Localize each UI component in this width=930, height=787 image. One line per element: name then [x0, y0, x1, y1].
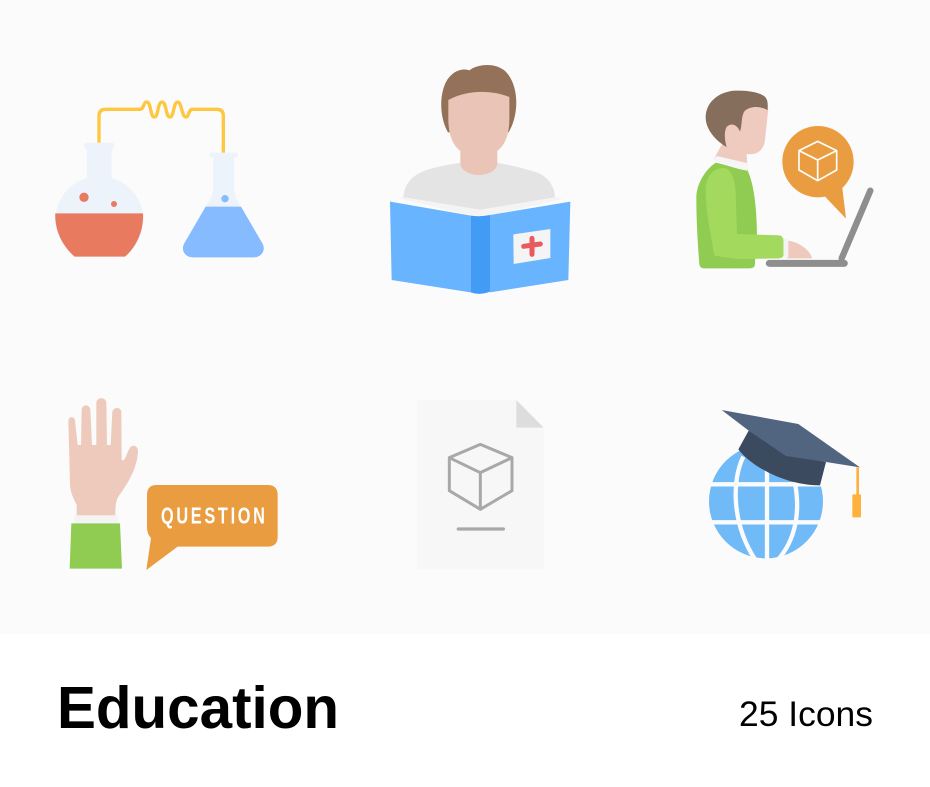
- icon: person at laptop with speech bubble: [696, 91, 870, 268]
- icon: raised hand with question bubble: [68, 398, 278, 570]
- graduation cap: [722, 410, 861, 517]
- speech bubble with cube: [782, 126, 854, 219]
- question bubble: QUESTION: [161, 504, 265, 529]
- book label with red cross: [513, 229, 550, 264]
- title: Education: [57, 675, 339, 741]
- icon count label: 25 Icons: [739, 695, 873, 734]
- icon: student reading a medical book: [390, 65, 570, 294]
- globe: [707, 440, 827, 560]
- icon: globe with graduation cap: [707, 410, 861, 560]
- icon: 3D file document: [417, 400, 544, 569]
- icon: chemistry flasks: [55, 102, 264, 257]
- laptop: [769, 191, 870, 263]
- question bubble: [146, 485, 278, 570]
